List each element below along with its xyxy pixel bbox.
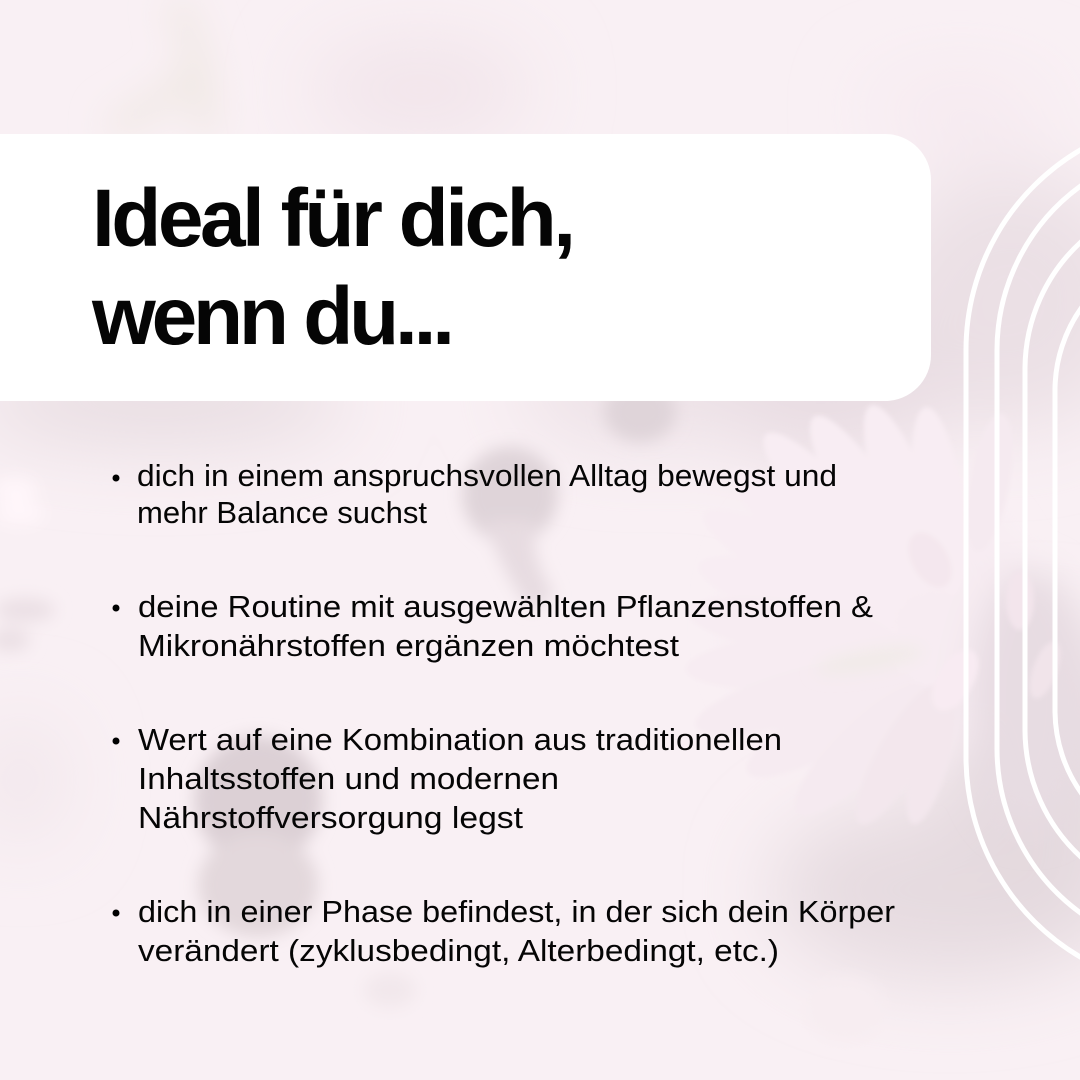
bullet 4: verändert (zyklusbedingt, Alterbedingt, etc.) xyxy=(138,933,779,968)
bullet 3: Inhaltsstoffen und modernen xyxy=(138,761,559,796)
droplets, balls and shadows xyxy=(0,382,885,1042)
heading: Ideal für dich, xyxy=(92,173,576,264)
blurred stem at top xyxy=(110,0,205,135)
bullet 2: deine Routine mit ausgewählten Pflanzenstoffen & xyxy=(138,589,873,624)
bullet 2: Mikronährstoffen ergänzen möchtest xyxy=(138,628,679,663)
bullet 2 xyxy=(112,589,873,663)
bullet 4: dich in einer Phase befindest, in der sich dein Körper xyxy=(138,894,895,929)
bullet 1: dich in einem anspruchsvollen Alltag bewegst und xyxy=(137,458,837,493)
bullet 1: mehr Balance suchst xyxy=(137,495,427,530)
flower at right xyxy=(684,397,1080,834)
bullet 3 xyxy=(112,722,782,835)
bullet 3: Nährstoffversorgung legst xyxy=(138,800,523,835)
heading: wenn du... xyxy=(91,271,455,362)
flower petals xyxy=(684,397,1067,834)
decorative concentric white arches xyxy=(966,149,1080,958)
bullet 3: Wert auf eine Kombination aus traditionellen xyxy=(138,722,782,757)
heading panel xyxy=(0,134,931,401)
flower centre xyxy=(814,641,926,679)
bullet 4 xyxy=(112,894,895,968)
bullet list xyxy=(112,458,895,968)
flower body xyxy=(730,470,1080,830)
heading xyxy=(91,173,576,362)
bullet 1 xyxy=(112,458,837,530)
